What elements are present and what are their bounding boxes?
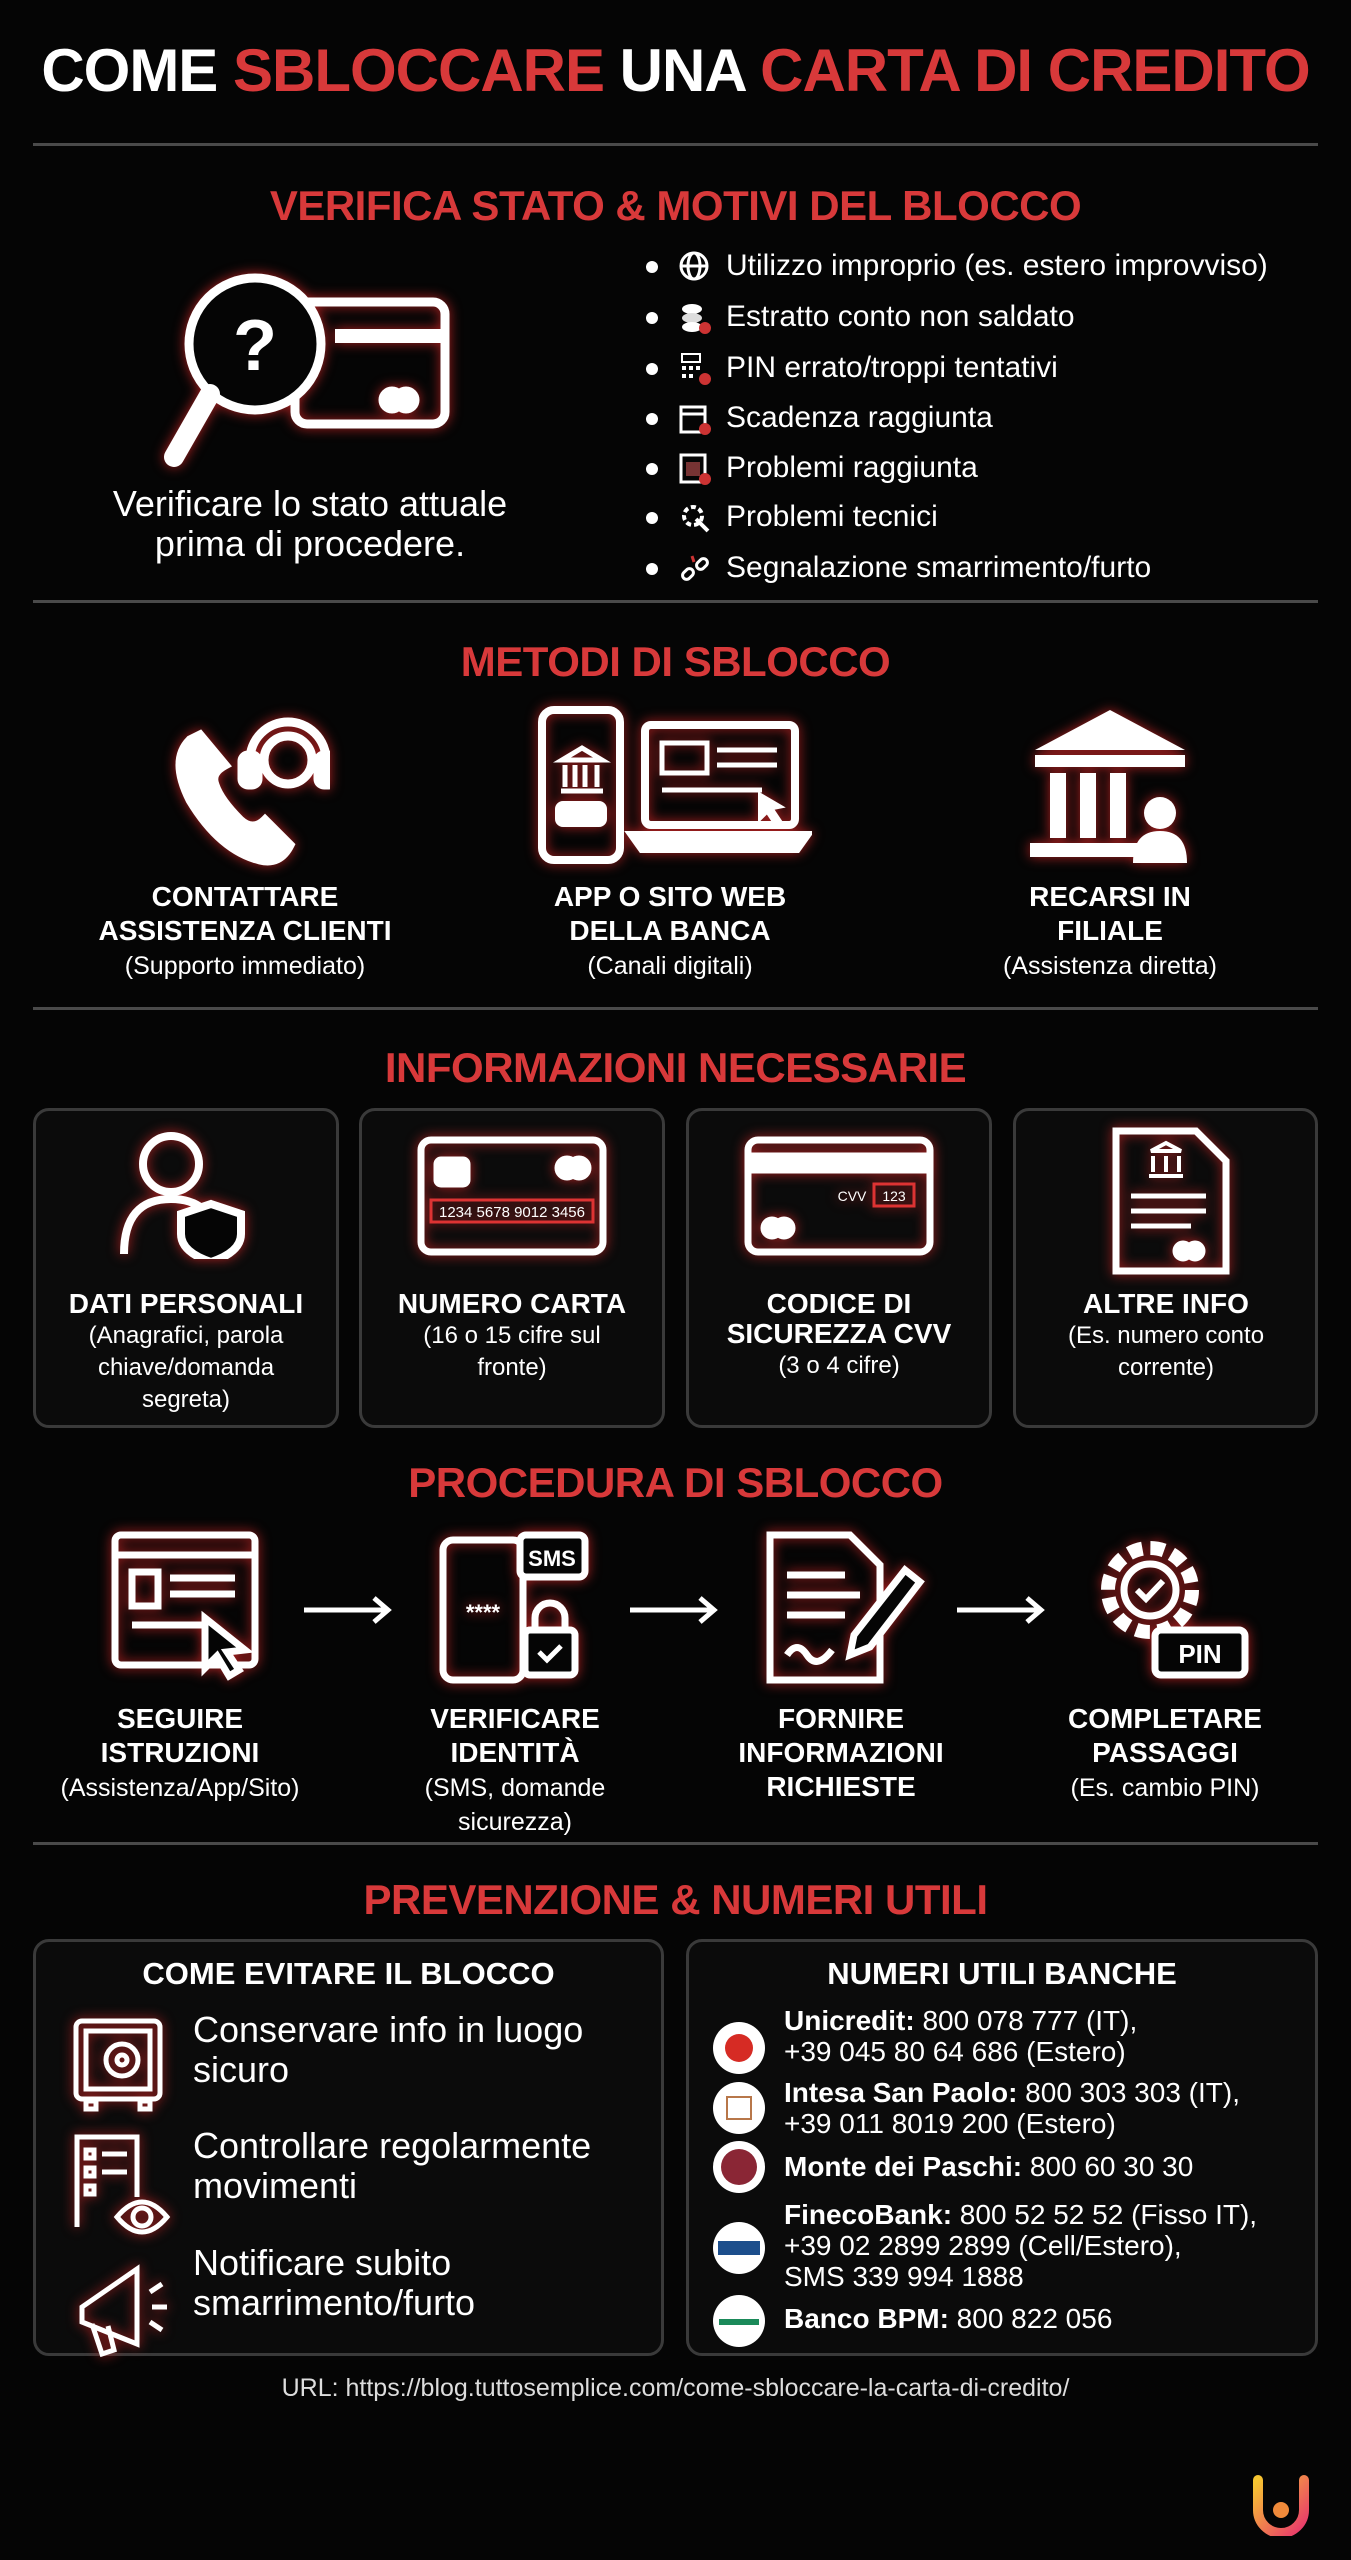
- item 1: Utilizzo improprio (es. estero improvviso): [726, 249, 1268, 282]
- icon: document: [1103, 1118, 1239, 1284]
- logo mps: [713, 2141, 765, 2193]
- text: altre info: (Es. numero conto: [1068, 1322, 1264, 1349]
- icon: step 4 gear pin: [1093, 1533, 1258, 1688]
- item 2: Estratto conto non saldato: [726, 300, 1075, 333]
- text: dati personali: [69, 1288, 303, 1413]
- heading: prevenzione: PREVENZIONE & NUMERI UTILI: [363, 1876, 988, 1923]
- icon: list eye: [65, 2125, 176, 2243]
- text: prevenzione tips: Controllare regolarmente: [193, 2125, 591, 2166]
- icon: headset phone: [166, 708, 340, 874]
- label: step 2: [425, 1703, 605, 1836]
- label: contattare assistenza: CONTATTARE: [152, 881, 338, 912]
- icon: step 1 instructions: [102, 1522, 268, 1687]
- icon: card number: 1234 5678 9012 3456: [439, 1204, 585, 1221]
- icon: megaphone: [70, 2259, 172, 2364]
- panel: dati personali: [33, 1108, 339, 1428]
- icon: step 3 document: [757, 1522, 931, 1693]
- label: step 2: IDENTITÀ: [450, 1737, 580, 1768]
- text: prevenzione tips: smarrimento/furto: [193, 2282, 475, 2323]
- label: step 4: (Es. cambio PIN): [1071, 1774, 1259, 1802]
- label: step 3: RICHIESTE: [766, 1771, 916, 1802]
- icon: step 2 verify: [430, 1522, 598, 1693]
- label: step 2: VERIFICARE: [430, 1703, 600, 1734]
- text: prevenzione tips: [193, 2009, 591, 2323]
- label: app o sito: DELLA BANCA: [569, 915, 771, 946]
- list: bank numbers: +39 045 80 64 686 (Estero): [784, 2036, 1126, 2067]
- logo banco bpm: [713, 2295, 765, 2347]
- label: step 2: sicurezza): [458, 1808, 572, 1836]
- item 5: Problemi raggiunta: [726, 451, 978, 484]
- list: bank numbers: FinecoBank: 800 52 52 52 (Fisso IT),: [784, 2199, 1257, 2230]
- icon: card cvv: CVV: [838, 1188, 867, 1204]
- item 6: Problemi tecnici: [726, 500, 938, 533]
- panel: numeri utili banche: [686, 1939, 1318, 2356]
- text: numero carta: NUMERO CARTA: [398, 1288, 626, 1319]
- text: dati personali: (Anagrafici, parola: [89, 1322, 283, 1349]
- icon: magnifier and card: [156, 264, 459, 475]
- text: altre info: corrente): [1118, 1354, 1214, 1381]
- text: numero carta: [398, 1288, 626, 1381]
- panel: cvv: [686, 1108, 992, 1428]
- item 4: Scadenza raggiunta: [726, 401, 993, 434]
- list: bank numbers: Monte dei Paschi: 800 60 30 30: [784, 2151, 1193, 2182]
- label: step 1: ISTRUZIONI: [101, 1737, 259, 1768]
- label: app o sito: (Canali digitali): [587, 952, 753, 980]
- label: step 3: [738, 1703, 944, 1802]
- label: step 2: (SMS, domande: [425, 1774, 605, 1802]
- panel: numero carta: [359, 1108, 665, 1428]
- icon: step 4 gear pin: PIN: [1178, 1639, 1222, 1669]
- text: prevenzione tips: movimenti: [193, 2165, 357, 2206]
- title: COME SBLOCCARE UNA CARTA DI CREDITO: [41, 37, 1310, 104]
- label: filiale: FILIALE: [1057, 915, 1163, 946]
- list: motivi del blocco: [646, 249, 1268, 584]
- logo fineco: [713, 2222, 765, 2274]
- icon: person shield: [112, 1123, 254, 1268]
- text: numero carta: fronte): [477, 1354, 547, 1381]
- label: step 4: COMPLETARE: [1068, 1703, 1262, 1734]
- icon: card cvv: [735, 1127, 943, 1265]
- text: altre info: [1068, 1288, 1264, 1381]
- list: bank numbers: Intesa San Paolo: 800 303 303 (IT),: [784, 2077, 1240, 2108]
- heading: metodi di sblocco: METODI DI SBLOCCO: [461, 638, 890, 685]
- text: altre info: ALTRE INFO: [1083, 1288, 1249, 1319]
- text: dati personali: segreta): [142, 1386, 230, 1413]
- label: app o sito: [554, 881, 786, 980]
- text: prevenzione tips: Conservare info in luogo: [193, 2009, 583, 2050]
- text: cvv: CODICE DI: [767, 1288, 911, 1319]
- list: bank numbers: +39 011 8019 200 (Estero): [784, 2108, 1116, 2139]
- list: bank numbers: Banco BPM: 800 822 056: [784, 2303, 1112, 2334]
- logo: brand: [1250, 2474, 1312, 2536]
- arrow 2: [630, 1596, 718, 1624]
- label: filiale: [1003, 881, 1217, 980]
- text: cvv: SICUREZZA CVV: [727, 1318, 951, 1349]
- icon: card number: [408, 1127, 616, 1265]
- icon: magnifier and card: ?: [233, 306, 277, 386]
- list: bank numbers: +39 02 2899 2899 (Cell/Estero),: [784, 2230, 1182, 2261]
- label: app o sito: APP O SITO WEB: [554, 881, 786, 912]
- label: filiale: (Assistenza diretta): [1003, 952, 1217, 980]
- label: filiale: RECARSI IN: [1029, 881, 1191, 912]
- logo intesa: [713, 2082, 765, 2134]
- text: verificare stato: [113, 483, 507, 564]
- heading: come evitare: COME EVITARE IL BLOCCO: [142, 1956, 555, 1991]
- text: dati personali: chiave/domanda: [98, 1354, 274, 1381]
- text: verificare stato: Verificare lo stato attuale: [113, 483, 507, 524]
- heading: informazioni necessarie: INFORMAZIONI NECESSARIE: [385, 1044, 966, 1091]
- list: bank numbers: SMS 339 994 1888: [784, 2261, 1024, 2292]
- label: step 4: PASSAGGI: [1092, 1737, 1238, 1768]
- list: bank numbers: Unicredit: 800 078 777 (IT),: [784, 2005, 1137, 2036]
- label: contattare assistenza: (Supporto immediato): [125, 952, 365, 980]
- panel: come evitare il blocco: [33, 1939, 664, 2356]
- item 3: PIN errato/troppi tentativi: [726, 351, 1058, 384]
- item 7: Segnalazione smarrimento/furto: [726, 551, 1151, 584]
- label: step 1: SEGUIRE: [117, 1703, 243, 1734]
- icon: app and web: [528, 696, 819, 874]
- icon: card cvv: 123: [882, 1188, 906, 1204]
- text: dati personali: DATI PERSONALI: [69, 1288, 303, 1319]
- arrow 3: [957, 1596, 1045, 1624]
- url footer: URL: https://blog.tuttosemplice.com/come-sbloccare-la-carta-di-credito/: [282, 2374, 1069, 2402]
- list: bank numbers: [700, 2000, 1310, 2350]
- label: step 3: INFORMAZIONI: [738, 1737, 944, 1768]
- label: contattare assistenza: [98, 881, 391, 980]
- label: step 4: [1068, 1703, 1262, 1802]
- label: contattare assistenza: ASSISTENZA CLIENTI: [98, 915, 391, 946]
- panel: altre info: [1013, 1108, 1318, 1428]
- icon: safe: [64, 2009, 172, 2120]
- text: cvv: [727, 1288, 952, 1379]
- text: cvv: (3 o 4 cifre): [778, 1352, 900, 1379]
- label: step 3: FORNIRE: [778, 1703, 904, 1734]
- heading: numeri utili: NUMERI UTILI BANCHE: [827, 1956, 1177, 1991]
- arrow 1: [304, 1596, 392, 1624]
- heading: verifica stato: VERIFICA STATO & MOTIVI DEL BLOCCO: [270, 182, 1081, 229]
- label: step 1: (Assistenza/App/Sito): [60, 1774, 300, 1802]
- text: prevenzione tips: sicuro: [193, 2049, 289, 2090]
- icon: bank building: [1022, 702, 1196, 872]
- text: prevenzione tips: Notificare subito: [193, 2242, 451, 2283]
- logo unicredit: [713, 2022, 765, 2074]
- text: verificare stato: prima di procedere.: [155, 523, 465, 564]
- icon: step 2 verify: SMS: [528, 1546, 576, 1571]
- label: step 1: [60, 1703, 300, 1802]
- text: numero carta: (16 o 15 cifre sul: [423, 1322, 601, 1349]
- icon: step 2 verify: ****: [466, 1600, 501, 1625]
- heading: procedura di sblocco: PROCEDURA DI SBLOCCO: [408, 1459, 943, 1506]
